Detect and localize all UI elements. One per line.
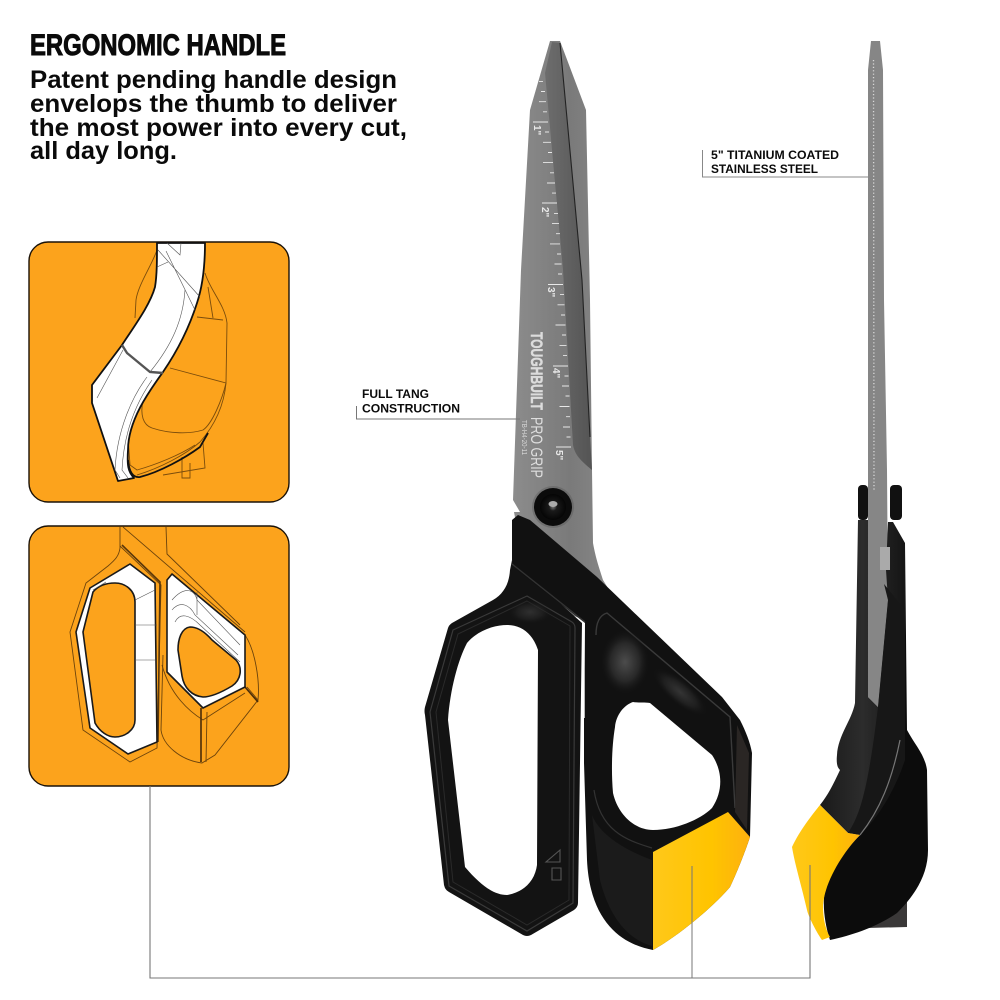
pivot screw [532,486,574,528]
back of handle outline [128,250,227,478]
description text: envelops the thumb to deliver [30,90,397,118]
description text: all day long. [30,137,177,165]
ruler ticks [533,81,571,447]
callout: titanium blade: 5" TITANIUM COATED [711,148,839,162]
inch labels: 4" [550,368,561,379]
yellow grip front [653,812,750,950]
callout: titanium blade [702,148,868,177]
inch labels [531,125,564,461]
inch labels: 3" [545,287,556,298]
callout: full tang: CONSTRUCTION [362,402,460,416]
inch labels: 1" [531,125,542,136]
inch labels: 5" [553,450,564,461]
side handle bottom stub [867,900,907,928]
callout: full tang: FULL TANG [362,387,429,401]
callout: leader from panels to yellow grips [150,786,810,978]
description text: Patent pending handle design [30,66,397,94]
blade brand text: PRO GRIP [527,417,546,478]
side handle back [824,543,928,940]
left handle [424,560,582,936]
side handle body [820,520,905,835]
scissors side view [792,41,928,940]
panel: finger loops line drawing [29,526,289,786]
blade bevel [545,42,592,470]
side blade serration [872,60,875,490]
side pivot knobs [858,485,902,520]
right handle with bridge [512,515,752,950]
callout: full tang [356,387,520,419]
loop outlines [70,527,258,763]
blade [513,41,640,640]
handle detail lines [97,243,200,478]
description text [30,66,407,165]
white handle shape [92,243,205,481]
side blade [868,41,888,707]
callout: titanium blade: STAINLESS STEEL [711,162,818,176]
handle logo [546,850,561,880]
yellow grip side [792,805,860,940]
left loop [76,564,157,754]
right loop [167,574,245,708]
blade brand text [520,332,546,478]
blade edge line [560,43,590,437]
white slit [582,623,585,718]
description text: the most power into every cut, [30,114,407,142]
title: ERGONOMIC HANDLE [30,29,286,62]
panel: handle side line drawing [29,242,289,502]
scissors front view [424,41,752,950]
blade brand text: TOUGHBUILT [527,332,546,410]
inch labels: 2" [539,207,550,218]
blade brand text: TB-H4-20-11 [520,420,529,455]
